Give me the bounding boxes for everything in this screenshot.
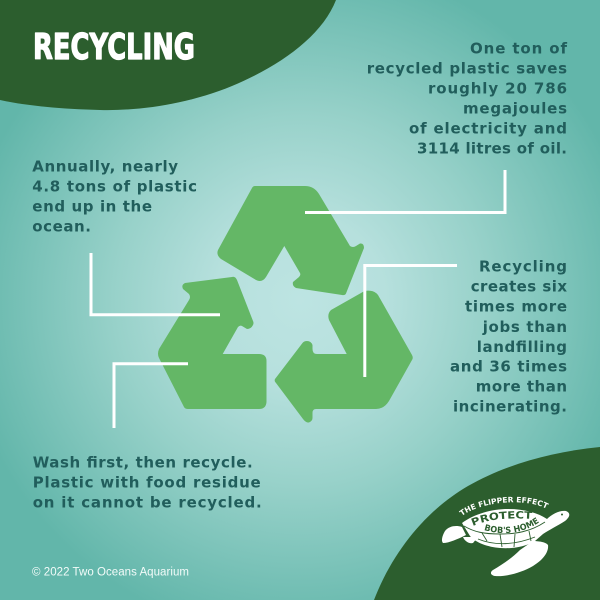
arrow: lower right xyxy=(275,291,413,423)
text block: ocean plastic: end up in the xyxy=(32,198,152,216)
text block: ocean plastic: ocean. xyxy=(32,218,91,236)
text block: recycled plastic savings: 3114 litres of oil. xyxy=(417,139,567,157)
text block: recycling jobs: jobs than xyxy=(482,318,567,336)
text block: wash first: Plastic with food residue xyxy=(33,473,261,491)
text block: recycling jobs: more than xyxy=(476,378,567,396)
title: RECYCLING xyxy=(33,27,195,68)
turtle body xyxy=(442,509,569,576)
arrow: lower left xyxy=(158,277,266,409)
text block: wash first xyxy=(33,453,262,511)
text block: ocean plastic: 4.8 tons of plastic xyxy=(32,178,197,196)
logo: turtle with The Flipper Effect: THE FLIPPER EFFECT xyxy=(458,496,549,515)
text block: recycling jobs: times more xyxy=(465,298,567,316)
text block: recycling jobs: and 36 times xyxy=(450,358,567,376)
connector line: plastic saving xyxy=(305,170,505,212)
arrow: top xyxy=(217,186,364,295)
text block: recycled plastic savings xyxy=(367,39,567,157)
text block: recycled plastic savings: megajoules xyxy=(463,99,567,117)
logo: turtle with The Flipper Effect xyxy=(442,496,570,576)
shell text xyxy=(473,518,533,526)
text block: ocean plastic xyxy=(32,158,197,236)
connector line: wash first xyxy=(114,364,188,428)
text block: recycled plastic savings: of electricity and xyxy=(409,119,567,137)
text block: recycled plastic savings: roughly 20 786 xyxy=(428,79,567,97)
logo: turtle with The Flipper Effect: PROTECT xyxy=(471,511,532,526)
arc text xyxy=(462,502,547,516)
turtle eye xyxy=(561,514,563,516)
connector line: jobs xyxy=(365,266,457,377)
recycling symbol xyxy=(158,186,413,423)
text block: wash first: Wash first, then recycle. xyxy=(33,453,253,471)
text block: recycling jobs: incinerating. xyxy=(453,398,567,416)
text block: recycling jobs: landfilling xyxy=(477,338,567,356)
text block: ocean plastic: Annually, nearly xyxy=(32,158,178,176)
text block: recycling jobs: creates six xyxy=(471,278,567,296)
text block: recycled plastic savings: One ton of xyxy=(470,39,567,57)
connector line: ocean plastic xyxy=(91,253,220,315)
logo: turtle with The Flipper Effect: BOB'S HOME xyxy=(484,517,539,533)
text block: recycling jobs xyxy=(450,257,567,416)
text block: recycled plastic savings: recycled plastic saves xyxy=(367,59,567,77)
text block: recycling jobs: Recycling xyxy=(479,257,567,275)
shell scutes xyxy=(464,522,545,547)
copyright: © 2022 Two Oceans Aquarium xyxy=(32,567,189,579)
bottom-right green corner shape xyxy=(374,447,600,600)
text block: wash first: on it cannot be recycled. xyxy=(33,493,262,511)
top-left green corner shape xyxy=(0,0,336,110)
